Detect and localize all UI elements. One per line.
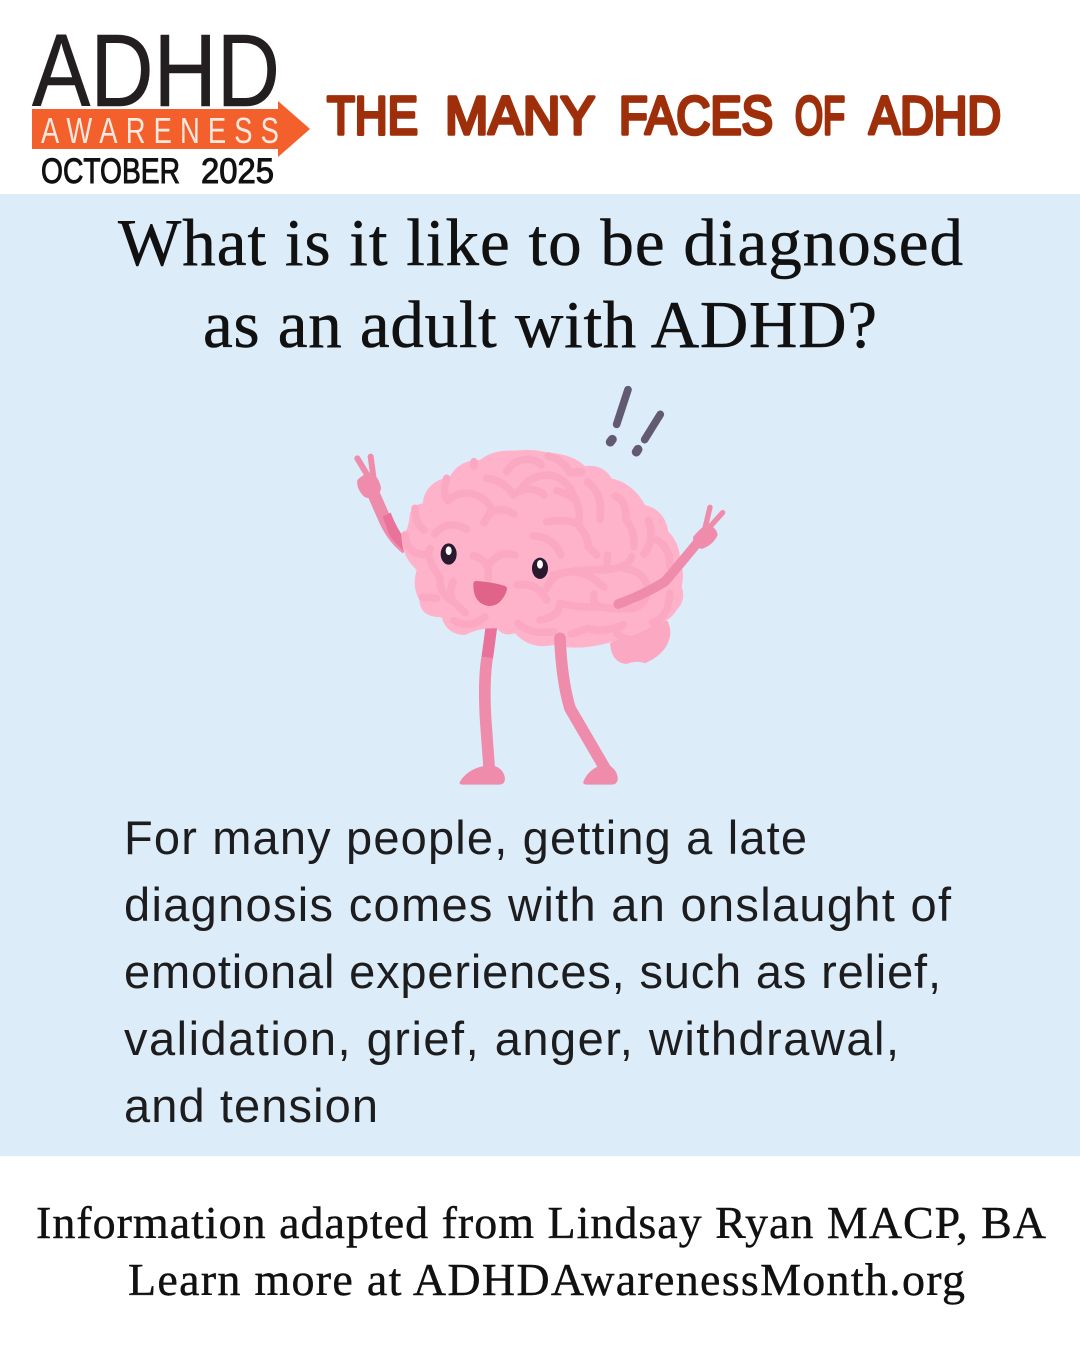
brain folds [405,456,670,648]
logo: ADHD Awareness October 2025 [32,13,310,191]
footer: source and link: Information adapted from Lindsay Ryan MACP, BA [36,1197,1046,1248]
logo date: October 2025: 2025 [201,152,274,191]
brain left leg [460,625,505,785]
illustration: walking brain character [357,390,723,785]
exclamation marks [610,390,660,452]
footer: source and link [36,1197,1046,1305]
body text: late diagnosis description: diagnosis comes with an onslaught of [124,878,952,931]
heading: main question: as an adult with ADHD? [203,288,877,362]
body text: late diagnosis description [124,811,952,1132]
left arm [357,457,407,551]
right arm [618,507,723,604]
cerebellum [610,621,670,664]
body text: late diagnosis description: validation, grief, anger, withdrawal, [124,1012,899,1065]
brain body, arms and face [357,390,723,664]
logo date: October 2025: OCTOBER [41,152,180,191]
series title: The Many Faces of ADHD: FACES [619,86,773,146]
mouth [473,581,507,606]
body text: late diagnosis description: and tension [124,1079,378,1132]
body text: late diagnosis description: emotional experiences, such as relief, [124,945,941,998]
footer: source and link: Learn more at ADHDAwarenessMonth.org [128,1254,965,1305]
left eye [441,543,457,565]
brain silhouette [402,450,683,648]
heading: main question: What is it like to be diagnosed [118,206,963,280]
heading: main question [118,206,963,362]
series title: The Many Faces of ADHD: OF [795,86,845,146]
series title: The Many Faces of ADHD: THE [327,86,418,146]
right eye [532,558,548,579]
series title: The Many Faces of ADHD: ADHD [869,86,1001,146]
logo text: AWARENESS: AWARENESS [41,110,279,151]
series title: The Many Faces of ADHD: MANY [445,86,595,146]
logo wordmark: ADHD: ADHD [32,13,280,128]
logo arrow [32,101,310,157]
series title: The Many Faces of ADHD [327,86,1001,146]
brain right leg [560,638,618,785]
panel: light blue content band [0,194,1080,1156]
body text: late diagnosis description: For many people, getting a late [124,811,807,864]
